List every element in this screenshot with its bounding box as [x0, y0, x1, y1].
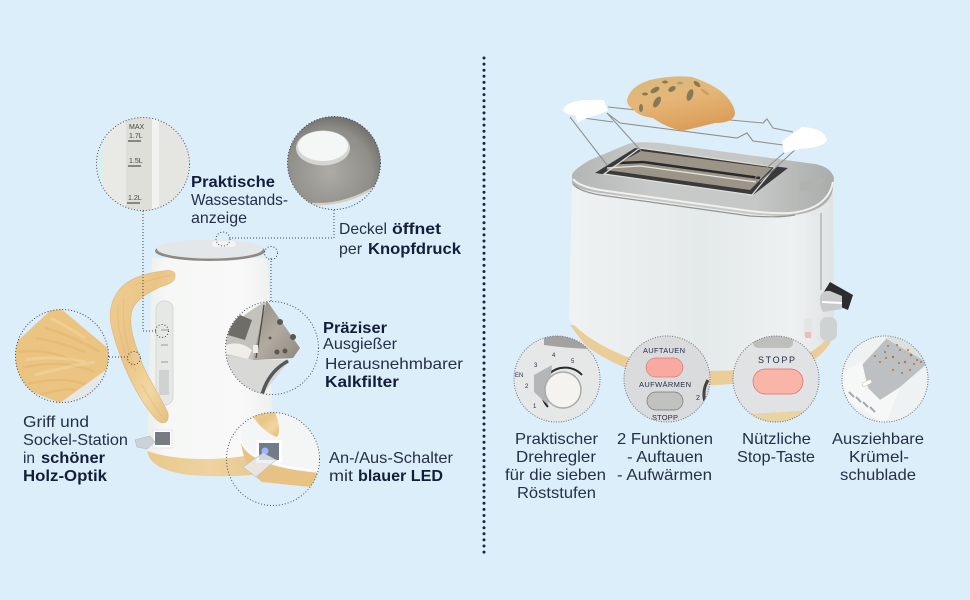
kettle lid	[155, 240, 265, 261]
label: wood look	[23, 414, 128, 485]
caption: stop button: Stop-Taste	[737, 449, 815, 466]
label: spout: Ausgießer	[323, 336, 398, 353]
caption: functions: 2 Funktionen	[617, 431, 713, 448]
rack right handle	[782, 127, 827, 153]
label: wood look: Sockel-Station	[23, 432, 128, 449]
label: switch: blauer LED	[358, 468, 443, 485]
caption: stop button	[737, 431, 815, 466]
label: filter	[325, 356, 464, 391]
label: wood look: in	[23, 450, 35, 467]
caption: dial: Röststufen	[517, 485, 596, 502]
dial numbers: 1	[533, 404, 537, 410]
label: wood look: Griff und	[23, 414, 89, 431]
caption: crumb tray	[832, 431, 924, 484]
label: lid: Knopfdruck	[368, 241, 461, 258]
label: lid: per	[339, 241, 363, 258]
callout: lid button	[287, 116, 381, 215]
caption: crumb tray: schublade	[840, 467, 916, 484]
toaster detail circle: functions: AUFWÄRMEN	[639, 380, 691, 389]
toaster detail circle: functions: AUFTAUEN	[643, 346, 685, 355]
label: water level: Praktische	[191, 174, 275, 191]
callout: LED switch	[226, 410, 322, 506]
label: spout: Präziser	[323, 320, 387, 337]
toaster detail circle: dial	[514, 335, 600, 422]
toaster detail circle: functions	[624, 336, 710, 422]
label: wood look: Holz-Optik	[23, 468, 107, 485]
label: switch: An-/Aus-Schalter	[329, 450, 454, 467]
toaster slots	[595, 148, 788, 195]
kettle body	[147, 258, 273, 459]
kettle wooden handle	[110, 270, 175, 423]
toaster detail circle: stop button: STOPP	[758, 355, 795, 365]
toaster wooden base	[570, 325, 834, 385]
callout: spout and filter	[225, 301, 318, 395]
caption: functions: - Aufwärmen	[617, 467, 712, 484]
caption: dial: Drehregler	[516, 449, 597, 466]
gauge markings: 1.2L	[128, 195, 142, 202]
toaster detail circle: functions: 2	[696, 395, 700, 402]
toaster product image	[563, 76, 853, 385]
kettle text labels	[23, 174, 464, 485]
rack left handle	[563, 100, 608, 123]
label: switch: mit	[329, 468, 354, 485]
label: switch	[329, 450, 454, 485]
caption: crumb tray: Krümel-	[849, 449, 909, 466]
label: filter: Herausnehmbarer	[325, 356, 464, 373]
toaster body	[569, 182, 834, 371]
gauge markings	[127, 124, 144, 203]
dial numbers	[515, 353, 575, 410]
toaster detail circle: stop button	[733, 336, 819, 430]
caption: crumb tray: Ausziehbare	[832, 431, 924, 448]
caption: functions: - Auftauen	[627, 449, 703, 466]
toasting rack	[570, 107, 797, 182]
gauge markings: MAX	[129, 124, 144, 131]
central dotted divider	[482, 58, 486, 553]
callout: wood texture	[15, 309, 109, 403]
callout: water level gauge	[96, 117, 190, 211]
label: lid	[339, 221, 461, 258]
caption: dial: Praktischer	[515, 431, 599, 448]
callout connector lines	[109, 210, 334, 364]
toaster chrome top	[572, 142, 834, 217]
label: filter: Kalkfilter	[325, 374, 399, 391]
water level window	[156, 301, 173, 405]
gauge markings: 1.7L	[129, 133, 143, 140]
side slit	[820, 213, 822, 290]
switch on kettle	[135, 430, 172, 449]
toaster lever	[820, 282, 853, 312]
dial numbers: 5	[571, 359, 575, 365]
bread roll with seeds	[627, 76, 735, 131]
caption: stop button: Nützliche	[742, 431, 811, 448]
dial numbers: 2	[525, 384, 529, 390]
toaster detail circle: crumb tray	[842, 336, 928, 425]
side dial	[804, 317, 837, 341]
gauge markings: 1.5L	[129, 158, 143, 165]
dial numbers: 4	[552, 353, 556, 359]
dial numbers: 3	[534, 363, 538, 369]
label: water level	[191, 174, 288, 227]
label: water level: Wassestands-	[191, 192, 288, 209]
label: water level: anzeige	[191, 210, 247, 227]
caption: dial	[505, 431, 606, 502]
dial numbers: EN	[515, 373, 523, 379]
label: wood look: schöner	[41, 450, 105, 467]
caption: functions	[617, 431, 713, 484]
caption: dial: für die sieben	[505, 467, 606, 484]
kettle product image	[110, 240, 274, 476]
label: lid: Deckel	[339, 221, 387, 238]
label: spout	[323, 320, 398, 353]
toaster detail circle: functions: STOPP	[652, 413, 678, 422]
kettle wooden base	[147, 449, 274, 476]
label: lid: öffnet	[392, 221, 442, 238]
